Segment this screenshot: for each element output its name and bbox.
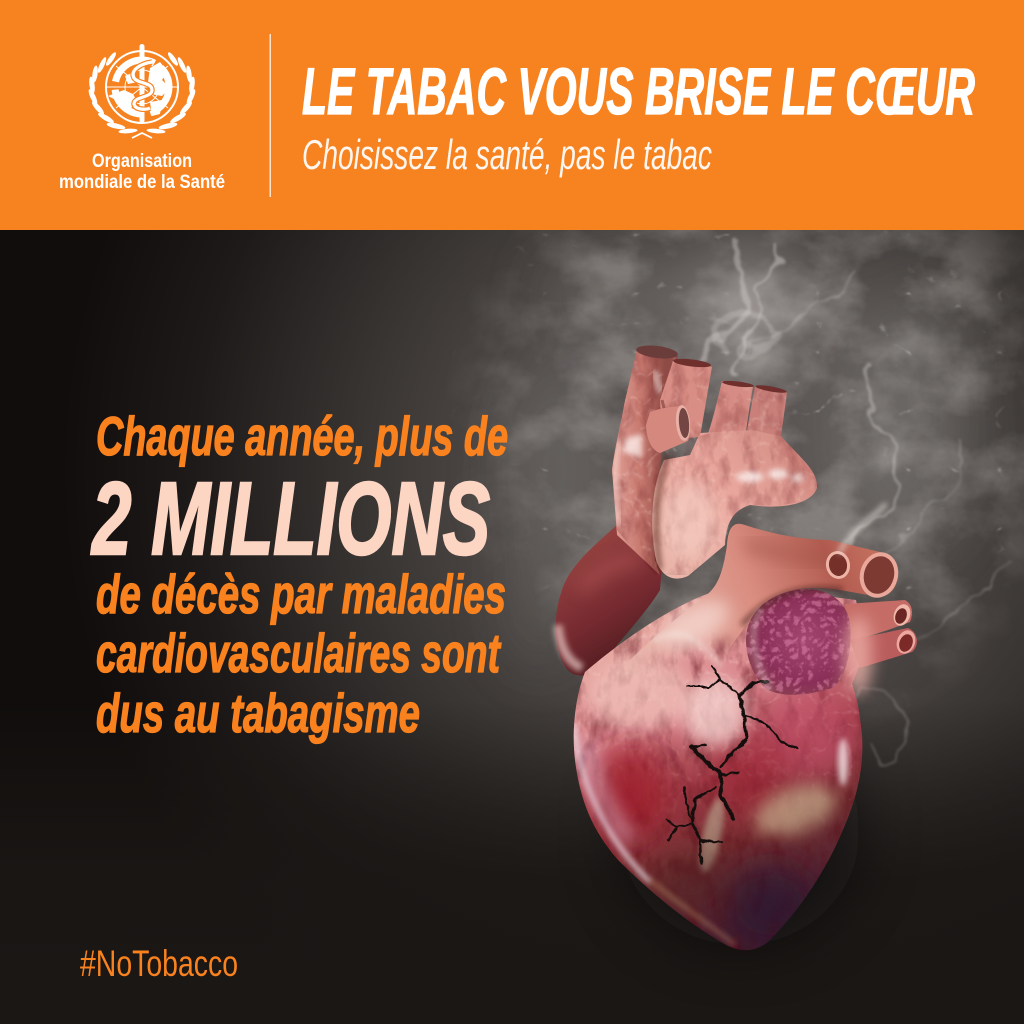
icon: globe — [106, 51, 178, 123]
upper vessels and trunk — [612, 346, 817, 579]
cracks — [667, 667, 797, 863]
vessel stub 4 — [747, 386, 787, 436]
line: causes 2: cardiovasculaires sont — [96, 622, 502, 684]
side vein stub — [646, 404, 692, 453]
icon: rod and serpent — [133, 44, 152, 123]
left atrium — [556, 525, 662, 676]
smoke: soft clouds — [505, 240, 990, 670]
pulmonary branches — [845, 600, 919, 668]
heart shadow — [620, 715, 860, 945]
smoke over the heart — [655, 505, 885, 690]
line: causes 1: de décès par maladies — [96, 563, 506, 625]
line: big number: 2 MILLIONS — [91, 461, 490, 576]
smoke around the heart — [477, 230, 1024, 768]
central pulmonary trunk — [652, 430, 817, 579]
statistic text block — [91, 405, 508, 744]
icon: continents — [108, 62, 170, 116]
icon: left laurel — [87, 51, 138, 134]
hashtag: #NoTobacco — [80, 943, 238, 984]
logo: WHO emblem — [87, 44, 197, 138]
vessel stub 3 — [708, 381, 753, 434]
line: intro: Chaque année, plus de — [96, 405, 508, 467]
line: causes 3: dus au tabagisme — [96, 682, 420, 744]
shading and texture — [612, 352, 817, 575]
left vein tube — [612, 348, 678, 575]
vessel stub 2 — [660, 360, 712, 440]
header band — [0, 0, 1024, 230]
aortic arch tube — [630, 524, 898, 666]
header divider — [270, 34, 271, 197]
smoke: filaments — [518, 230, 1004, 590]
organisation name: mondiale de la Santé — [59, 172, 225, 193]
smoke: fog texture — [480, 230, 1024, 666]
icon: right laurel — [132, 51, 197, 138]
ventricles and body — [574, 594, 862, 950]
auricle — [740, 585, 872, 700]
heart illustration — [556, 340, 919, 960]
vessel openings — [635, 343, 787, 394]
smoke: rising wisps — [699, 240, 1010, 766]
subtitle: Choisissez la santé, pas le tabac — [302, 131, 712, 178]
organisation name — [59, 151, 225, 193]
organisation name: Organisation — [92, 151, 192, 172]
